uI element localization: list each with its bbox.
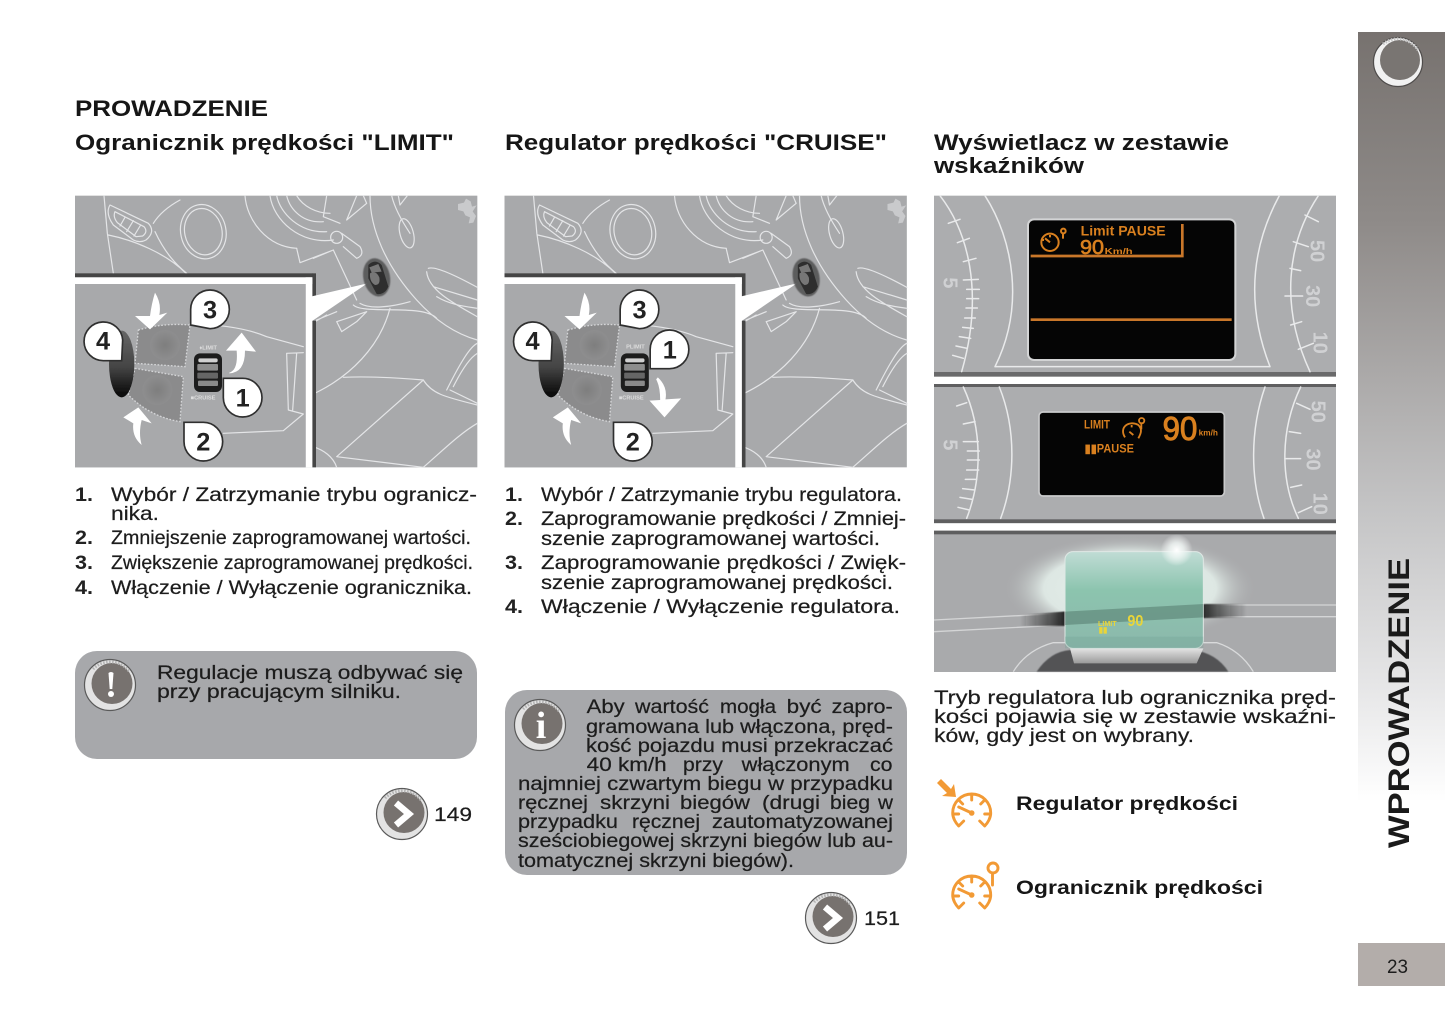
callout text: bieg bbox=[830, 793, 870, 814]
badge 2 bbox=[613, 422, 652, 461]
badge 4: 4 bbox=[525, 327, 540, 355]
list: cruise functions: szenie zaprogramowanej prędkości. bbox=[541, 573, 893, 594]
text: display explanation bbox=[934, 688, 1336, 747]
readout: 90 km/h: 90 bbox=[1080, 236, 1104, 259]
panel: matrix display photo bbox=[934, 196, 1336, 377]
badge 4 bbox=[514, 322, 552, 361]
label: limit: ♦LIMIT bbox=[199, 345, 218, 351]
badge 2 bbox=[184, 422, 223, 461]
arrows bbox=[123, 293, 256, 445]
readout: 90 km/h: 90 bbox=[1163, 411, 1197, 448]
list: limit functions: 1. bbox=[75, 485, 93, 506]
badge 2: 2 bbox=[626, 429, 640, 457]
sidebar tab bbox=[1358, 32, 1445, 848]
column heading: cruise: Regulator prędkości "CRUISE" bbox=[505, 130, 887, 155]
icon: information bbox=[514, 700, 566, 750]
callout text: ręcznej bbox=[632, 812, 700, 833]
readout: 90 km/h bbox=[1163, 411, 1218, 448]
callout text: przy pracującym silniku. bbox=[157, 682, 401, 703]
list: limit functions: 2. bbox=[75, 528, 93, 549]
callout text bbox=[518, 697, 893, 872]
callout text: mogła bbox=[720, 697, 776, 718]
page reference: 149: 149 bbox=[434, 805, 472, 826]
callout text: wartość bbox=[634, 697, 709, 718]
page number tab: 23 bbox=[1387, 957, 1408, 978]
readout: limit: LIMIT bbox=[1084, 418, 1111, 432]
badge 1 bbox=[223, 378, 262, 417]
list: cruise functions: 3. bbox=[505, 553, 523, 574]
callout text: gramowana lub włączona, pręd- bbox=[586, 717, 893, 738]
callout text: Aby bbox=[587, 697, 625, 718]
label: cruise: ■CRUISE bbox=[619, 395, 644, 401]
column heading: display: wskaźników bbox=[933, 153, 1085, 178]
page number tab bbox=[1358, 943, 1445, 986]
readout: limit pause: Limit PAUSE bbox=[1081, 223, 1166, 238]
readout: pause: ▮▮PAUSE bbox=[1085, 441, 1134, 455]
callout: engine running bbox=[75, 651, 477, 759]
list: limit functions: Zwiększenie zaprogramowanej prędkości. bbox=[111, 553, 473, 574]
list: cruise functions: Zaprogramowanie prędkości / Zmniej- bbox=[541, 509, 906, 530]
callout text: przypadku bbox=[518, 812, 618, 833]
list: limit functions: Włączenie / Wyłączenie ogranicznika. bbox=[111, 578, 472, 599]
label: regulator: Regulator prędkości bbox=[1016, 794, 1238, 815]
list: cruise functions: szenie zaprogramowanej wartości. bbox=[541, 529, 880, 550]
callout text: Regulacje muszą odbywać się bbox=[157, 663, 463, 684]
page reference: 151 bbox=[806, 892, 900, 944]
callout text: sześciobiegowej skrzyni biegów lub au- bbox=[518, 831, 893, 852]
icon: limiter bbox=[1123, 418, 1144, 438]
text: display explanation: kości pojawia się w zestawie wskaźni- bbox=[934, 707, 1336, 728]
badge 4: 4 bbox=[96, 327, 110, 355]
list: limit functions: nika. bbox=[111, 504, 159, 525]
icon: warning bbox=[84, 660, 136, 710]
badge 3 bbox=[620, 290, 659, 329]
badge 1: 1 bbox=[236, 385, 250, 413]
callout text: w bbox=[877, 793, 893, 814]
readout: 90 km/h: km/h bbox=[1199, 428, 1218, 437]
label: limiter: Ogranicznik prędkości bbox=[1016, 878, 1263, 899]
column heading: display: Wyświetlacz w zestawie bbox=[934, 130, 1229, 155]
list: limit functions: 3. bbox=[75, 553, 93, 574]
readout: 90: 90 bbox=[1127, 613, 1143, 630]
panel: segment display photo: 10 bbox=[1308, 493, 1330, 515]
panel: segment display photo: 50 bbox=[1307, 401, 1329, 423]
callout: speed condition bbox=[505, 690, 907, 875]
callout text: biegów bbox=[680, 793, 750, 814]
badge 3: 3 bbox=[203, 296, 217, 324]
callout text: tomatycznej skrzyni biegów). bbox=[518, 851, 794, 872]
icon: cruise regulator bbox=[937, 779, 991, 826]
list: cruise functions: Wybór / Zatrzymanie trybu regulatora. bbox=[541, 485, 902, 506]
text: display explanation: ków, gdy jest on wybrany. bbox=[934, 726, 1194, 747]
list: limit functions bbox=[75, 485, 477, 599]
panel: matrix display photo: 30 bbox=[1301, 285, 1323, 307]
list: limit functions: Wybór / Zatrzymanie trybu ogranicz- bbox=[111, 485, 477, 506]
label: limit: PLIMIT bbox=[626, 345, 645, 351]
callout text: skrzyni bbox=[600, 793, 670, 814]
callout text: włączonym bbox=[741, 755, 850, 776]
panel: matrix display photo: 50 bbox=[1306, 240, 1328, 262]
section heading: PROWADZENIE bbox=[75, 96, 268, 121]
list: limit functions: 4. bbox=[75, 578, 93, 599]
column heading: display bbox=[933, 130, 1229, 178]
callout text: 40 km/h bbox=[587, 755, 667, 776]
readout: limit: LIMIT bbox=[1098, 619, 1117, 628]
list: cruise functions: Zaprogramowanie prędkości / Zwięk- bbox=[541, 553, 906, 574]
arrows bbox=[553, 293, 681, 445]
callout text: najmniej czwartym biegu w przypadku bbox=[518, 774, 893, 795]
readout: 90 km/h: Km/h bbox=[1105, 247, 1133, 256]
readout: pause bars: ▮▮ bbox=[1099, 625, 1107, 634]
readout: 90 km/h bbox=[1080, 236, 1133, 259]
panel: matrix display photo: 5 bbox=[938, 277, 960, 288]
callout text: (drugi bbox=[762, 793, 820, 814]
list: cruise functions: 1. bbox=[505, 485, 523, 506]
callout text bbox=[157, 663, 463, 703]
list: limit functions: Zmniejszenie zaprogramowanej wartości. bbox=[111, 528, 471, 549]
icon: speed limiter bbox=[953, 863, 998, 908]
panel: head-up display photo bbox=[934, 531, 1336, 672]
badge 3 bbox=[191, 290, 229, 329]
badge 1: 1 bbox=[663, 336, 677, 364]
icon: information: i bbox=[536, 705, 546, 747]
column heading: limit: Ogranicznik prędkości "LIMIT" bbox=[75, 130, 454, 155]
callout text: przy bbox=[683, 755, 724, 776]
callout text: zapro- bbox=[832, 697, 893, 718]
badge 2: 2 bbox=[196, 429, 210, 457]
panel: segment display photo: 5 bbox=[938, 439, 960, 450]
panel: matrix display photo: 10 bbox=[1308, 332, 1330, 354]
callout text: co bbox=[870, 755, 892, 776]
callout text: być bbox=[787, 697, 822, 718]
label: cruise: ■CRUISE bbox=[191, 395, 216, 401]
badge 4 bbox=[84, 322, 123, 361]
text: display explanation: Tryb regulatora lub ogranicznika pręd- bbox=[934, 688, 1336, 709]
icon: limiter bbox=[1041, 229, 1066, 251]
page reference: 149 bbox=[376, 788, 472, 840]
badge 1 bbox=[650, 330, 689, 369]
page reference: 151: 151 bbox=[864, 909, 900, 930]
panel: segment display photo: 30 bbox=[1302, 448, 1324, 471]
illustration: limit stalk controls bbox=[75, 196, 477, 467]
badge 3: 3 bbox=[632, 296, 647, 324]
list: cruise functions: 2. bbox=[505, 509, 523, 530]
panel: segment display photo bbox=[934, 384, 1336, 523]
list: cruise functions bbox=[505, 485, 906, 618]
callout text: zautomatyzowanej bbox=[712, 812, 893, 833]
callout text: ręcznej bbox=[518, 793, 588, 814]
icon: sidebar ring bbox=[1374, 38, 1422, 86]
list: cruise functions: 4. bbox=[505, 597, 523, 618]
illustration: cruise stalk controls bbox=[504, 196, 907, 467]
vertical section title: WPROWADZENIE bbox=[1383, 558, 1416, 848]
list: cruise functions: Włączenie / Wyłączenie regulatora. bbox=[541, 597, 900, 618]
callout text: kość pojazdu musi przekraczać bbox=[586, 736, 893, 757]
